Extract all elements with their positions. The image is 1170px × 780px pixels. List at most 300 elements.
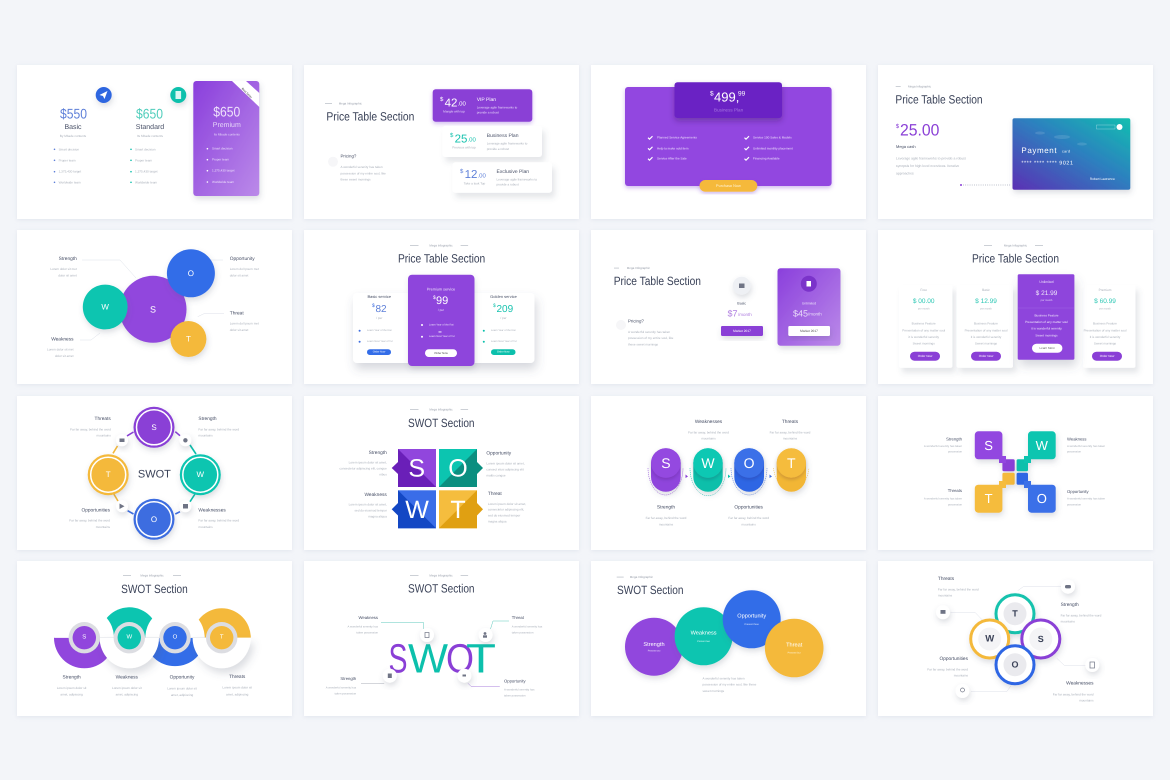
circle strength	[625, 618, 683, 676]
pill O	[731, 448, 772, 495]
label threats: Far far away, behind the word	[938, 587, 979, 591]
label threats: Lorem ipsum dolor sit	[222, 686, 252, 690]
label weaknesses	[688, 419, 729, 441]
title: SWOT Section	[617, 583, 684, 597]
label opportunity: Lorem dol Ipsum met	[230, 267, 259, 271]
label threats	[924, 488, 962, 507]
exclusive plan card	[452, 162, 552, 193]
premium service card: $	[433, 295, 436, 301]
premium service card: Learn Year of the Rat	[429, 324, 454, 326]
premium service card: 99	[436, 295, 448, 307]
label weakness: sed do eiusmod tempor	[354, 508, 387, 512]
free plan column: $ 00.00	[913, 298, 935, 305]
node T	[206, 622, 237, 653]
basic plan block: $7	[728, 309, 738, 319]
business plan card: .00	[468, 136, 477, 144]
label threats: Threats	[95, 416, 111, 422]
coloured half discs	[54, 607, 251, 668]
VIP plan card: 42	[445, 97, 457, 109]
circle O: O	[188, 269, 194, 278]
top price tab: $	[710, 90, 714, 98]
basic service column: $	[372, 303, 375, 309]
label opportunity: Lorem ipsum dolor sit	[167, 687, 197, 691]
purchase button	[700, 180, 757, 192]
plan description: Leverage agile frameworks to provide a robust	[896, 157, 966, 161]
node T: T	[220, 634, 224, 641]
white lower half discs	[100, 638, 251, 668]
label weakness: Weakness	[116, 674, 139, 680]
label threats: Threats	[782, 419, 799, 425]
tag line	[614, 266, 650, 270]
unlimited plan card	[778, 268, 840, 346]
pill O: O	[744, 455, 755, 471]
panel: basic standard premium pricing	[17, 65, 292, 219]
tag line	[123, 573, 181, 577]
panel: basic and unlimited plans	[591, 230, 866, 384]
premium plan card: Worldwide team	[212, 180, 235, 184]
basic plan column	[956, 285, 1013, 368]
label threats: Threats	[229, 674, 246, 680]
pricing note: these sweet mornings	[628, 342, 659, 346]
tag line: Mega Infographic	[429, 407, 453, 411]
label strength: Strength	[946, 436, 963, 442]
label strength: Far far away, behind the word	[1061, 613, 1102, 617]
label opportunity	[1067, 489, 1106, 507]
node O	[159, 622, 191, 653]
square S: S	[408, 455, 425, 483]
plan description: approaches	[896, 171, 914, 175]
label strength: Strength	[1061, 602, 1079, 608]
price: 25.00	[900, 122, 939, 140]
premium plan card: Its Mbade contents	[214, 132, 240, 136]
pricing note: A wonderful serenity has taken	[628, 330, 670, 334]
spine line	[100, 637, 206, 639]
panel: price table section plan cards	[304, 65, 579, 219]
tile W: W	[1036, 438, 1049, 453]
label strength: Strength	[340, 676, 357, 681]
label opportunities: mountains	[742, 522, 756, 526]
label strength: Lorem ipsum dolor sit	[57, 686, 87, 690]
standard plan column: $650	[136, 106, 163, 122]
tile T: T	[985, 491, 993, 506]
free plan column: Presentation of any matter soul	[902, 328, 945, 332]
title: Price Table Section	[326, 109, 414, 123]
label opportunities: mountains	[96, 525, 110, 529]
exclusive plan card: $	[460, 168, 464, 175]
unlimited plan card: Market 2017	[800, 329, 818, 333]
business plan card: 25	[455, 133, 467, 145]
label strength	[924, 436, 963, 454]
premium plan card: Best Seller	[241, 87, 253, 99]
free plan column	[899, 285, 952, 368]
basic plan column: Presentation of any matter soul	[965, 328, 1008, 332]
golden service column: Golden service	[490, 294, 518, 299]
label weaknesses: Weaknesses	[695, 419, 723, 425]
label weakness	[112, 674, 142, 696]
basic plan column: Sweet mornings	[975, 341, 998, 345]
feature list with checks	[648, 136, 793, 161]
label strength	[326, 676, 357, 696]
top price tab: 99	[738, 90, 746, 98]
big letters	[388, 636, 496, 682]
label threats: mountains	[938, 594, 953, 598]
label weaknesses: Weaknesses	[1066, 680, 1094, 686]
square T	[439, 490, 483, 528]
circle weakness	[675, 607, 733, 665]
premium plan card	[193, 81, 259, 196]
tile T	[975, 473, 1015, 513]
node S	[134, 407, 174, 448]
feature list with checks: Service After the Sale	[657, 157, 687, 161]
price: $	[896, 123, 900, 130]
label opportunity: Lorem ipsum dolor sit amet,	[486, 461, 525, 465]
unlimited plan column: Business Feature	[1034, 313, 1059, 317]
golden service column: Learn Year of the Rat	[491, 329, 516, 332]
business plan card: provide a robust	[487, 147, 509, 151]
label opportunities	[927, 656, 969, 678]
tag line: Mega Infographic	[908, 85, 932, 89]
label opportunity	[504, 678, 535, 697]
circle T	[170, 321, 206, 357]
premium plan card: 1,375,430 target	[212, 169, 235, 173]
basic plan column	[54, 106, 87, 184]
panel: four column price table	[878, 230, 1153, 384]
pricing note: possession of my entire soul, like	[340, 171, 386, 175]
label threat: consectetur adipiscing elit,	[488, 507, 524, 511]
tag line: Mega Infographic	[627, 266, 650, 270]
label opportunity: consect elusi adipiscing elit	[486, 467, 524, 471]
plan description: synopsis for high level overviews. Iterative	[896, 164, 959, 168]
label weaknesses: mountains	[701, 437, 716, 441]
plan description: Mega cash	[896, 144, 916, 149]
pricing note: A wonderful serenity has taken	[340, 165, 383, 169]
basic service column: 82	[376, 304, 387, 315]
panel: SWOT venn bubbles	[17, 230, 292, 384]
top price tab: Business Plan	[714, 108, 744, 112]
premium plan card: Smart decision	[212, 147, 233, 151]
label weakness	[348, 615, 379, 634]
basic plan column: per month	[980, 308, 992, 310]
label threats: possession	[948, 503, 962, 507]
basic service column: Order Now	[373, 350, 385, 354]
circle S	[120, 276, 186, 343]
label weaknesses: mountains	[1079, 699, 1094, 703]
circle weakness: Weakness	[691, 630, 717, 637]
circle W	[83, 285, 128, 329]
label weakness: Weakness	[364, 492, 387, 498]
pill S: S	[661, 455, 671, 471]
free plan column: Order Now	[918, 354, 933, 358]
tag line	[984, 243, 1043, 247]
title: SWOT Section	[408, 416, 475, 430]
label opportunity: Opportunity	[170, 674, 195, 680]
circle threat: Present four	[788, 652, 801, 654]
callout lines	[950, 587, 1087, 691]
tag line	[410, 573, 468, 577]
label strength: possession	[948, 450, 962, 454]
pill W	[690, 448, 730, 496]
icon badges	[936, 580, 1099, 698]
circle weakness: Present two	[697, 640, 711, 643]
label strength: mountains	[1061, 620, 1075, 624]
description: A wonderful serenity has taken	[702, 676, 745, 680]
label opportunity: dolor sit amet	[230, 274, 249, 278]
golden service column: Order Now	[497, 350, 510, 354]
label threats	[70, 416, 111, 438]
basic service column: Learn Year of the Rat	[367, 329, 392, 332]
premium plan column: Business Feature	[1093, 322, 1117, 326]
VIP plan card	[433, 89, 532, 122]
label threat	[230, 310, 259, 332]
tile S	[975, 431, 1015, 471]
basic plan column: Order Now	[979, 354, 994, 358]
label threats: mountains	[97, 434, 111, 438]
business plan card: Leverage agile frameworks to	[487, 141, 528, 145]
title: Price Table Section	[972, 252, 1059, 266]
label opportunities: mountains	[954, 674, 968, 678]
free plan column: Sweet mornings	[913, 341, 935, 345]
free plan column: per month	[918, 308, 930, 310]
label opportunity	[167, 674, 197, 697]
label opportunity: A wonderful serenity has taken	[1067, 497, 1106, 501]
tile O: O	[1037, 491, 1047, 506]
label opportunity	[230, 256, 259, 278]
business plan card: Previous with top	[452, 145, 476, 149]
panel: SWOT big letters	[304, 561, 579, 716]
VIP plan card: VIP Plan	[477, 97, 496, 103]
description	[702, 676, 757, 693]
label opportunities: Far far away, behind the word	[728, 516, 769, 520]
panel: SWOT overlapping circles	[591, 561, 866, 716]
label threat: Threat	[488, 491, 502, 497]
ring T: T	[1012, 609, 1018, 619]
unlimited plan card: /month	[808, 312, 822, 316]
VIP plan card: .00	[458, 100, 467, 108]
label weakness: magna aliqua	[368, 514, 387, 518]
tag line	[410, 243, 468, 247]
label opportunities: Opportunities	[81, 508, 111, 514]
square O: O	[448, 455, 468, 483]
premium service card: Learn Next Year of Tur	[429, 335, 455, 338]
node W: W	[126, 634, 132, 641]
VIP plan card: $	[440, 96, 444, 103]
tile O	[1017, 473, 1056, 513]
label strength: mountains	[198, 434, 213, 438]
unlimited plan card: Unlimited	[802, 302, 816, 306]
label weakness	[349, 492, 387, 518]
label threat: Lorem ipsum dolor sit amet,	[488, 502, 526, 506]
basic plan column: By Mbade contents	[60, 134, 87, 138]
basic plan column: $550	[60, 106, 87, 122]
premium plan column: Sweet mornings	[1094, 341, 1117, 345]
payment card: **** **** **** 9021	[1021, 160, 1074, 166]
label strength: Lorem ipsum dolor sit amet,	[349, 460, 387, 464]
ring T	[996, 595, 1034, 633]
node W: W	[197, 470, 205, 479]
label weakness: Weakness	[359, 615, 378, 620]
circle T: T	[186, 334, 191, 344]
basic plan column: $ 12.99	[975, 298, 997, 305]
golden service column	[483, 294, 518, 355]
unlimited plan column: per month	[1041, 299, 1053, 302]
basic plan column: 1,375,430 target	[59, 170, 81, 174]
label opportunities: Opportunities	[734, 504, 764, 510]
white upper half discs	[55, 608, 205, 638]
title: Price Table Section	[398, 252, 485, 266]
exclusive plan card: 12	[465, 169, 477, 181]
label weakness: Weakness	[51, 336, 74, 342]
node O	[134, 499, 174, 540]
label strength	[50, 256, 77, 278]
label strength: Lorem dolor sit met	[50, 267, 77, 271]
feature list with checks: Planned Service Agreements	[657, 136, 697, 140]
top price tab: 499,	[714, 90, 739, 104]
circle strength: Strength	[643, 641, 665, 648]
label weaknesses	[198, 508, 239, 529]
panel: SWOT interlocked rings	[878, 561, 1153, 716]
title: Price Table Section	[895, 93, 983, 107]
title: SWOT Section	[408, 582, 475, 596]
label strength: Far far away, behind the word	[198, 427, 239, 431]
standard plan column: Standard	[136, 123, 164, 131]
pill W: W	[701, 455, 715, 471]
label threats: Threats	[948, 488, 962, 493]
label opportunity: Opportunity	[504, 678, 527, 684]
unlimited plan column: it is wonderful serenity	[1031, 327, 1062, 331]
VIP plan card: Mangle with top	[443, 109, 465, 113]
basic plan column: Worldwide team	[59, 180, 81, 184]
payment card: card	[1062, 150, 1070, 154]
circle W: W	[101, 302, 109, 312]
label opportunities: Opportunities	[939, 656, 969, 662]
label weaknesses	[1053, 680, 1094, 703]
label weakness: taken possession	[356, 630, 378, 634]
VIP plan card: provide a robust	[477, 110, 499, 114]
basic plan column: Basic	[64, 123, 82, 131]
basic service column	[359, 294, 393, 355]
label weakness: A wonderful serenity has taken	[1067, 444, 1106, 448]
unlimited plan column: Unlimited	[1039, 280, 1054, 284]
premium plan column: per month	[1099, 308, 1111, 310]
label threat: taken possession	[512, 630, 534, 634]
label threat: Threat	[512, 615, 525, 620]
label weakness: Weakness	[1067, 436, 1086, 442]
label weakness: dolor sit amet	[55, 354, 74, 358]
golden service column: / per	[500, 316, 507, 320]
big letters: S	[388, 636, 408, 682]
label strength	[646, 504, 687, 526]
unlimited plan card: $45	[793, 308, 808, 318]
pricing note	[328, 154, 386, 181]
premium plan column: it is wonderful serenity	[1090, 335, 1121, 339]
label opportunity: possession	[1067, 503, 1081, 507]
big letters: O	[446, 636, 474, 682]
label strength	[57, 674, 87, 696]
label strength: amet, adipiscing	[60, 692, 83, 696]
label weakness: Lorem ipsum dolor sit	[112, 686, 142, 690]
premium service card: Premium service	[427, 288, 455, 292]
label threats	[770, 419, 811, 441]
tag line: Mega Infographic	[429, 243, 453, 247]
pricing note	[616, 318, 674, 346]
business plan card: $	[450, 132, 454, 139]
square S	[392, 449, 436, 487]
label weakness: Lorem ipsum dolor sit amet,	[349, 503, 387, 507]
label opportunity: Opportunity	[486, 450, 512, 456]
label opportunities: Far far away, behind the word	[927, 668, 968, 672]
pricing note: Pricing?	[628, 318, 644, 324]
label opportunity: Opportunity	[230, 256, 255, 262]
label strength: Far far away, behind the word	[646, 516, 687, 520]
feature list with checks: Unlimited monthly placement	[753, 146, 793, 150]
label weaknesses: Weaknesses	[198, 508, 226, 514]
exclusive plan card: .00	[478, 172, 487, 180]
exclusive plan card: provide a robust	[496, 183, 519, 187]
circle threat	[765, 619, 824, 677]
label opportunities: Far far away, behind the word	[69, 519, 110, 523]
circle O	[167, 249, 215, 297]
label strength: Strength	[369, 450, 387, 456]
label strength: nibus	[379, 473, 387, 477]
exclusive plan card: Take a look Top	[464, 181, 485, 185]
circle opportunity: Present three	[745, 623, 760, 626]
basic plan column: Business Feature	[974, 322, 998, 326]
label threats: Far far away, behind the word	[770, 430, 811, 434]
label strength	[1061, 602, 1102, 624]
tag line: Mega Infographic	[140, 573, 164, 577]
exclusive plan card: Leverage agile frameworks to	[496, 177, 537, 181]
center label: SWOT	[138, 468, 171, 480]
node S: S	[151, 423, 157, 432]
tag line: Mega Infographic	[1004, 243, 1028, 247]
free plan column: it is wonderful serenity	[908, 335, 939, 339]
panel: three tier service table	[304, 230, 579, 384]
standard plan column: Its Mbade contents	[137, 134, 164, 138]
premium plan column	[1083, 285, 1136, 368]
cycle connectors	[113, 432, 196, 514]
ring S: S	[1038, 634, 1044, 644]
tag line: Mega Infographic	[429, 573, 453, 577]
payment card: Payment	[1021, 146, 1057, 155]
label strength	[198, 416, 239, 438]
node O: O	[173, 634, 178, 641]
label strength: Strength	[657, 504, 675, 510]
premium service card: / per	[438, 308, 444, 312]
unlimited plan column	[1018, 274, 1074, 360]
payment card	[1012, 118, 1130, 190]
golden service column: Learn Next Year of Tur	[491, 340, 517, 343]
label weaknesses: Far far away, behind the word	[688, 430, 729, 434]
basic service column: Learn Next Year of Tur	[367, 340, 393, 343]
panel: SWOT squares	[304, 396, 579, 550]
exclusive plan card: Exclusive Plan	[496, 169, 529, 175]
label strength: Strength	[198, 416, 217, 422]
standard plan column: Worldwide team	[135, 180, 158, 184]
panel: SWOT cycle	[17, 396, 292, 550]
node S	[69, 622, 100, 653]
label threat: Threat	[230, 310, 244, 316]
big letters: T	[466, 636, 496, 682]
label strength	[340, 450, 387, 477]
dotted line	[960, 184, 1011, 186]
feature list with checks: Service 100 Sales & Models	[753, 136, 792, 140]
standard plan column: Smart decision	[135, 147, 156, 151]
basic service column: Basic service	[368, 294, 392, 299]
unlimited plan column: Presentation of any matter soul	[1025, 320, 1068, 324]
node T: T	[106, 470, 111, 479]
description: sweet mornings	[702, 689, 725, 693]
circle opportunity: Opportunity	[737, 613, 766, 620]
